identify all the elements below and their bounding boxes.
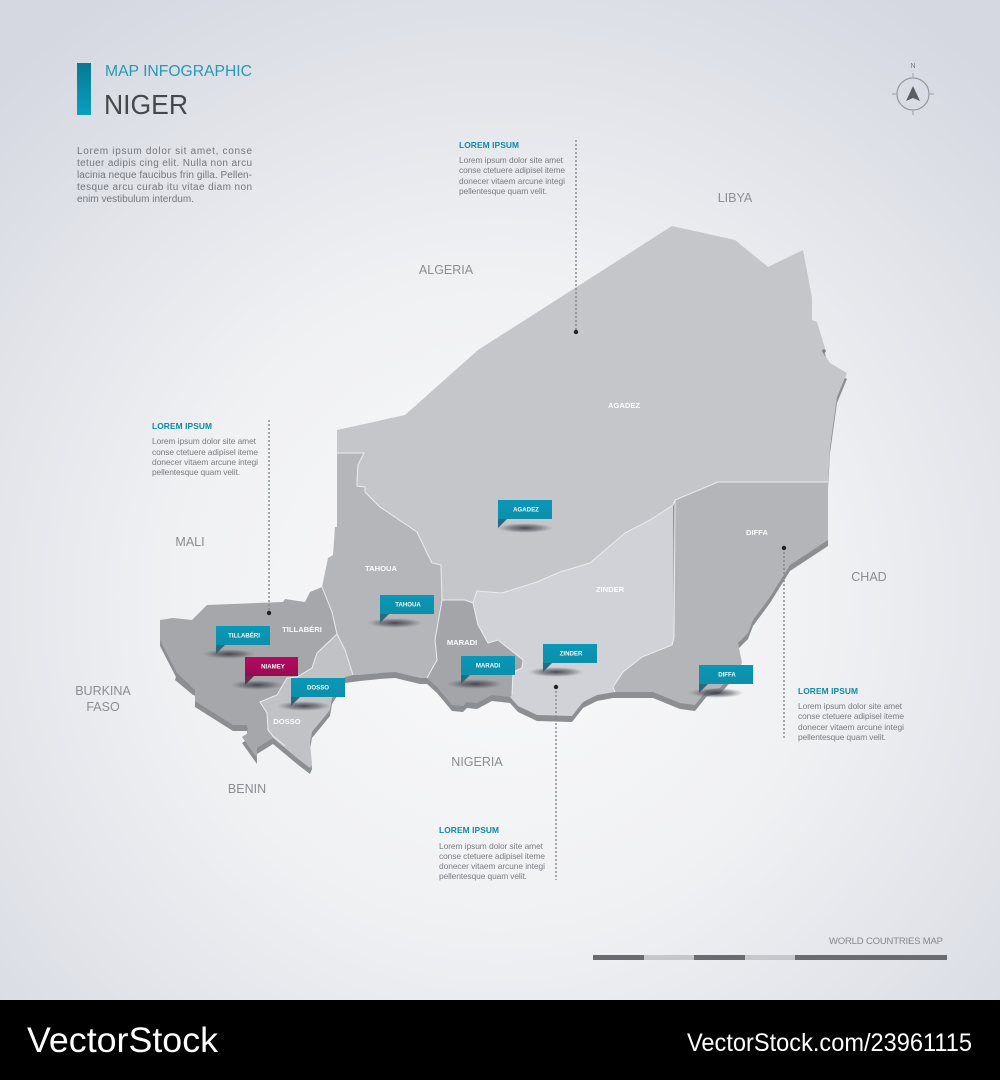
callout: left: donecer vitaem arcune integi — [152, 457, 258, 467]
callout: left: conse ctetuere adipisel iteme — [152, 447, 258, 457]
pin: Dosso — [277, 678, 345, 711]
region: Agadez — [337, 226, 847, 603]
callout: right: conse ctetuere adipisel iteme — [798, 711, 904, 721]
callout: top: LOREM IPSUM — [459, 140, 519, 150]
pin: Diffa: DIFFA — [718, 672, 736, 678]
pin: Tahoua: TAHOUA — [395, 602, 421, 608]
footer logo: VectorStock — [27, 1021, 219, 1060]
callout: top: Lorem ipsum dolor site amet — [459, 155, 564, 165]
neighbouring country labels: CHAD — [851, 570, 887, 584]
notch side, Tillabéri west — [175, 673, 208, 697]
footer band — [0, 1000, 1000, 1080]
icon: compass — [892, 63, 934, 115]
callout: left: Lorem ipsum dolor site amet — [152, 436, 257, 446]
pin: Maradi — [446, 656, 515, 689]
region labels: MARADI — [447, 638, 477, 647]
intro text block: tesque arcu curab itu vitae diam non — [77, 182, 252, 193]
pin: Niamey: NIAMEY — [261, 664, 285, 670]
region: Diffa — [613, 482, 828, 705]
neighbouring country labels: BURKINA — [75, 684, 131, 698]
callout: left: LOREM IPSUM — [152, 421, 212, 431]
scale caption: WORLD COUNTRIES MAP — [829, 936, 943, 947]
lake dot — [822, 349, 826, 353]
pin: Tillabéri: TILLABÉRI — [228, 632, 260, 640]
callout: top: conse ctetuere adipisel iteme — [459, 165, 565, 175]
callout: left — [152, 420, 271, 615]
region labels — [273, 401, 768, 726]
region labels: ZINDER — [596, 585, 625, 594]
intro text block: lacinia neque faucibus frin gilla. Pellen- — [77, 170, 252, 181]
intro text block — [77, 146, 252, 205]
region: Maradi — [427, 600, 523, 706]
callout: right: Lorem ipsum dolor site amet — [798, 701, 903, 711]
region labels: TAHOUA — [365, 564, 397, 573]
neighbouring country labels: LIBYA — [718, 191, 753, 205]
icon: compass: N — [910, 63, 916, 70]
title: map infographic: MAP INFOGRAPHIC — [105, 63, 252, 80]
callout: right: pellentesque quam velit. — [798, 732, 886, 742]
callout: top: donecer vitaem arcune integi — [459, 176, 565, 186]
title bar accent — [77, 63, 91, 115]
pin: Agadez — [497, 500, 553, 533]
pin: Tahoua — [367, 595, 434, 628]
region labels: TILLABÉRI — [282, 625, 322, 634]
map: Niger — [160, 226, 847, 774]
region: Zinder — [473, 505, 674, 716]
callout: bottom: conse ctetuere adipisel iteme — [439, 851, 545, 861]
neighbouring country labels: FASO — [86, 700, 120, 714]
scale bar — [593, 955, 947, 960]
map extrusion side — [160, 232, 847, 774]
intro text block: enim vestibulum interdum. — [77, 194, 194, 205]
pin: Maradi: MARADI — [476, 662, 500, 670]
pin: Niamey — [230, 657, 298, 690]
callout: bottom — [439, 685, 558, 881]
neighbouring country labels: ALGERIA — [419, 263, 474, 277]
region: Tillabéri — [160, 587, 337, 758]
callout: top — [459, 140, 578, 334]
callout: bottom: pellentesque quam velit. — [439, 871, 527, 881]
neighbouring country labels: BENIN — [228, 782, 266, 796]
region: Tahoua — [322, 453, 442, 678]
pin: Agadez: AGADEZ — [513, 506, 539, 514]
footer url: VectorStock.com/23961115 — [687, 1029, 972, 1057]
pin: Dosso: DOSSO — [307, 684, 329, 692]
neighbouring country labels: NIGERIA — [451, 755, 503, 769]
callout: right — [782, 546, 904, 742]
callout: bottom: Lorem ipsum dolor site amet — [439, 841, 544, 851]
callout: left: pellentesque quam velit. — [152, 467, 240, 477]
intro text block: Lorem ipsum dolor sit amet, conse — [77, 146, 252, 157]
title: Niger: NIGER — [104, 89, 188, 120]
region labels: DIFFA — [746, 528, 768, 537]
region labels: DOSSO — [273, 717, 301, 726]
callout: bottom: LOREM IPSUM — [439, 825, 499, 835]
pin: Zinder: ZINDER — [560, 650, 583, 658]
neighbouring country labels: MALI — [175, 535, 205, 549]
pin: Tillabéri — [202, 626, 270, 659]
callout: right: LOREM IPSUM — [798, 686, 858, 696]
callout: right: donecer vitaem arcune integi — [798, 722, 904, 732]
region: Dosso — [260, 634, 353, 768]
region labels: AGADEZ — [608, 401, 640, 410]
callout: top: pellentesque quam velit. — [459, 186, 547, 196]
pin: Diffa — [688, 665, 753, 698]
intro text block: tetuer adipis cing elit. Nulla non arcu — [77, 158, 252, 169]
pin: Zinder — [528, 644, 597, 677]
neighbouring country labels — [75, 191, 887, 796]
callout: bottom: donecer vitaem arcune integi — [439, 861, 545, 871]
